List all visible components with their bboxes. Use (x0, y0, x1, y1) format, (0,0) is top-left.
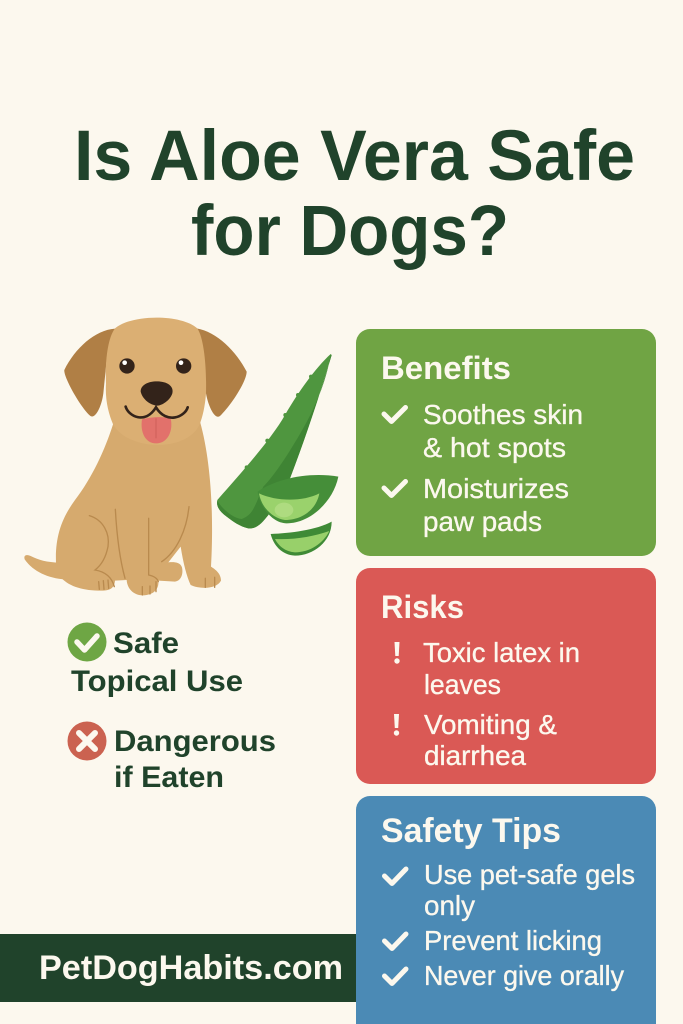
dangerous if eaten label (68, 722, 276, 794)
illustration: aloe vera (217, 354, 338, 556)
illustration: puppy (24, 318, 247, 595)
body (56, 422, 221, 595)
panel: safety tips: Prevent licking (424, 925, 602, 956)
panel: safety tips: Never give orally (424, 960, 624, 991)
panel: risks: Risks (381, 589, 464, 625)
title: for Dogs? (191, 192, 509, 271)
icon: check (384, 934, 406, 948)
panel: risks: Vomiting & (424, 709, 557, 740)
icon: check (384, 408, 406, 422)
icon: exclamation (394, 642, 400, 664)
footer banner (0, 934, 357, 1002)
panel: risks: Toxic latex in (423, 637, 580, 668)
panel: risks: leaves (424, 669, 501, 700)
panel: benefits: Moisturizes (423, 473, 569, 504)
icon: green check badge (68, 622, 106, 662)
mouth (126, 407, 188, 418)
leg lines (89, 507, 215, 595)
aloe slice small (271, 522, 332, 556)
panel: safety tips (356, 796, 656, 1024)
nose (141, 381, 173, 406)
head (106, 318, 206, 445)
panel: safety tips: only (424, 890, 475, 921)
safe topical use label: Safe (113, 627, 179, 660)
tongue (142, 417, 171, 443)
right ear (197, 328, 247, 417)
eyes (119, 358, 135, 374)
safe topical use label (68, 622, 243, 698)
panel: benefits: paw pads (423, 506, 542, 537)
icon: check (384, 969, 406, 984)
dangerous if eaten label: Dangerous (114, 725, 276, 758)
dangerous if eaten label: if Eaten (114, 761, 224, 794)
icon: check (384, 869, 406, 884)
icon: exclamation (394, 714, 399, 736)
panel: safety tips: Safety Tips (381, 812, 561, 850)
title (74, 117, 635, 271)
tail (24, 555, 65, 579)
panel: benefits (356, 329, 656, 556)
panel: risks: diarrhea (424, 740, 526, 771)
aloe leaf (217, 354, 332, 528)
footer banner: PetDogHabits.com (39, 949, 343, 987)
panel: benefits: & hot spots (423, 432, 566, 463)
aloe slice large (258, 475, 338, 523)
panel: benefits: Benefits (381, 350, 511, 386)
panel: risks (356, 568, 656, 784)
icon: red x badge (68, 722, 106, 760)
panel: safety tips: Use pet-safe gels (424, 859, 635, 890)
icon: check (384, 482, 406, 496)
safe topical use label: Topical Use (71, 665, 243, 698)
title: Is Aloe Vera Safe (74, 117, 635, 196)
panel: benefits: Soothes skin (423, 399, 583, 430)
left ear (64, 329, 115, 416)
